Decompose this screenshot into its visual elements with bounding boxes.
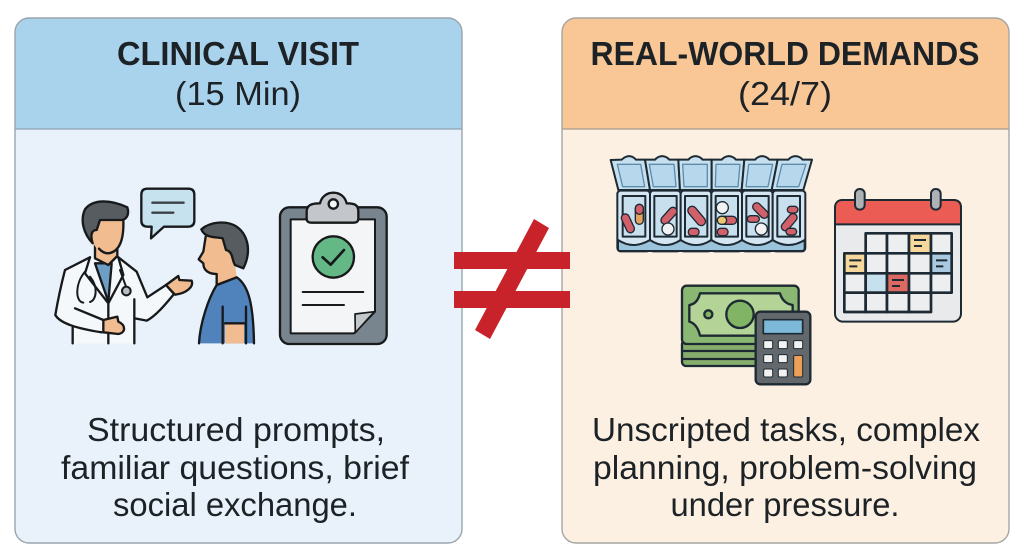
speech bubble: [141, 189, 194, 238]
clipboard board: [280, 207, 387, 344]
header band: clinical visit: [15, 18, 462, 129]
body text: clinical visit: [61, 411, 410, 523]
calendar page: [835, 200, 961, 322]
doctor hands: [166, 276, 192, 295]
doctor neck and face: [95, 245, 117, 265]
stethoscope: [77, 270, 126, 303]
not-equal symbol: [454, 219, 570, 339]
body text: clinical visit: familiar questions, brief: [61, 449, 410, 486]
calculator screen: [763, 320, 803, 334]
patient body: [199, 277, 254, 343]
patient face: [199, 237, 237, 285]
patient hair: [201, 223, 248, 268]
body text: clinical visit: social exchange.: [113, 486, 357, 523]
clip: [307, 193, 358, 223]
paper curl: [355, 312, 374, 333]
body text: real-world demands: [592, 411, 981, 523]
body text: clinical visit: Structured prompts,: [87, 411, 385, 448]
calculator keys: [764, 341, 803, 377]
body text: real-world demands: planning, problem-solving: [593, 449, 977, 486]
panel: clinical visit: [15, 18, 462, 543]
header band: real-world demands: [562, 18, 1009, 129]
icon: calendar: [835, 189, 961, 322]
date grid: [844, 233, 952, 312]
icon: weekly pill organizer: [611, 156, 812, 251]
body text: real-world demands: under pressure.: [670, 486, 900, 523]
lids: [611, 156, 650, 190]
check badge: [313, 236, 354, 278]
text lines: [303, 292, 363, 305]
subheading: 15 min: (15 Min): [175, 75, 301, 112]
bill stack: [682, 340, 799, 366]
binding rings: [855, 189, 865, 210]
paper: [291, 219, 375, 333]
doctor coat: [55, 257, 174, 343]
subheading: 24/7: (24/7): [738, 75, 832, 112]
body text: real-world demands: Unscripted tasks, complex: [592, 411, 981, 448]
compartments: [617, 191, 805, 251]
icon: doctor and patient conversation: [55, 189, 254, 343]
heading: clinical visit: CLINICAL VISIT: [117, 35, 359, 72]
doctor hair: [83, 201, 128, 243]
pills: [620, 201, 799, 236]
red header: [835, 200, 961, 224]
scalloped base: [618, 240, 805, 251]
panel: real-world demands: [562, 18, 1009, 543]
compartment windows: [623, 196, 800, 237]
top bill: [682, 286, 799, 344]
lid inner panels: [617, 164, 806, 187]
heading: real-world demands: REAL-WORLD DEMANDS: [590, 35, 980, 72]
icon: money stack and calculator: [682, 286, 810, 384]
event marks: [849, 240, 947, 286]
calculator: [756, 312, 810, 384]
icon: clipboard with check: [280, 193, 387, 344]
